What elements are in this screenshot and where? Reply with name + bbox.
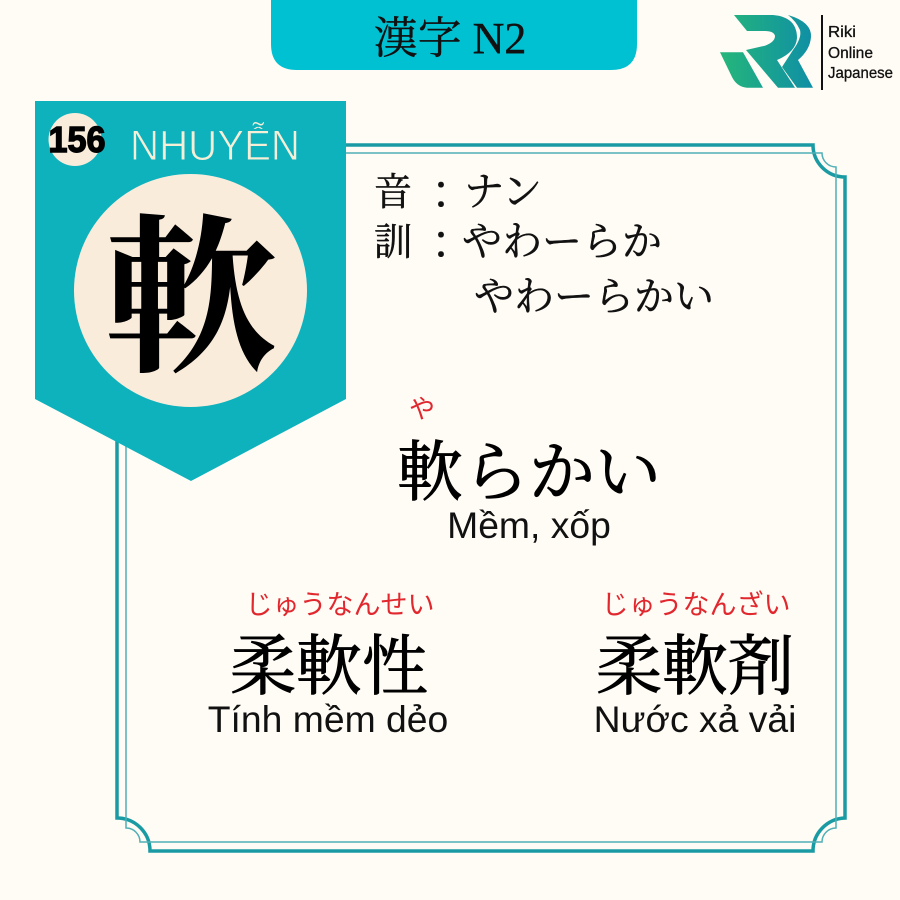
logo mark bbox=[720, 15, 813, 88]
decorative frame bbox=[117, 145, 845, 851]
meaning: Mềm, xốp bbox=[447, 504, 611, 546]
furigana: じゅうなんざい bbox=[602, 590, 790, 620]
reading label: NHUYỄN bbox=[130, 121, 300, 170]
furigana: や bbox=[409, 394, 435, 424]
logo divider bbox=[821, 15, 823, 90]
readings: ： bbox=[421, 222, 461, 267]
readings: 音 bbox=[374, 172, 412, 214]
main vocabulary bbox=[397, 394, 661, 546]
readings: ： bbox=[421, 172, 461, 217]
word: 柔軟剤 bbox=[596, 631, 794, 704]
meaning: Nước xả vải bbox=[594, 698, 796, 740]
readings: ナン bbox=[464, 169, 542, 214]
header tab bbox=[271, 0, 637, 70]
logo text: Online bbox=[828, 45, 873, 62]
readings: 訓 bbox=[374, 222, 412, 264]
readings: やわーらかい bbox=[474, 274, 714, 319]
kanji circle bbox=[74, 174, 307, 407]
meaning: Tính mềm dẻo bbox=[208, 698, 448, 740]
number badge: 156 bbox=[48, 119, 106, 160]
word: 軟らかい bbox=[397, 437, 661, 510]
word: 柔軟性 bbox=[230, 631, 428, 704]
logo bbox=[720, 15, 893, 90]
logo text: Riki bbox=[828, 24, 856, 41]
readings bbox=[374, 169, 714, 319]
logo text: Japanese bbox=[828, 65, 893, 82]
readings: やわーらか bbox=[462, 219, 662, 264]
kanji circle: 軟 bbox=[104, 207, 278, 396]
furigana: じゅうなんせい bbox=[246, 590, 434, 620]
vocabulary right bbox=[594, 590, 796, 740]
header title: 漢字 N2 bbox=[374, 14, 526, 63]
vocabulary left bbox=[208, 590, 448, 740]
banner bbox=[35, 101, 346, 481]
logo text bbox=[828, 24, 893, 82]
